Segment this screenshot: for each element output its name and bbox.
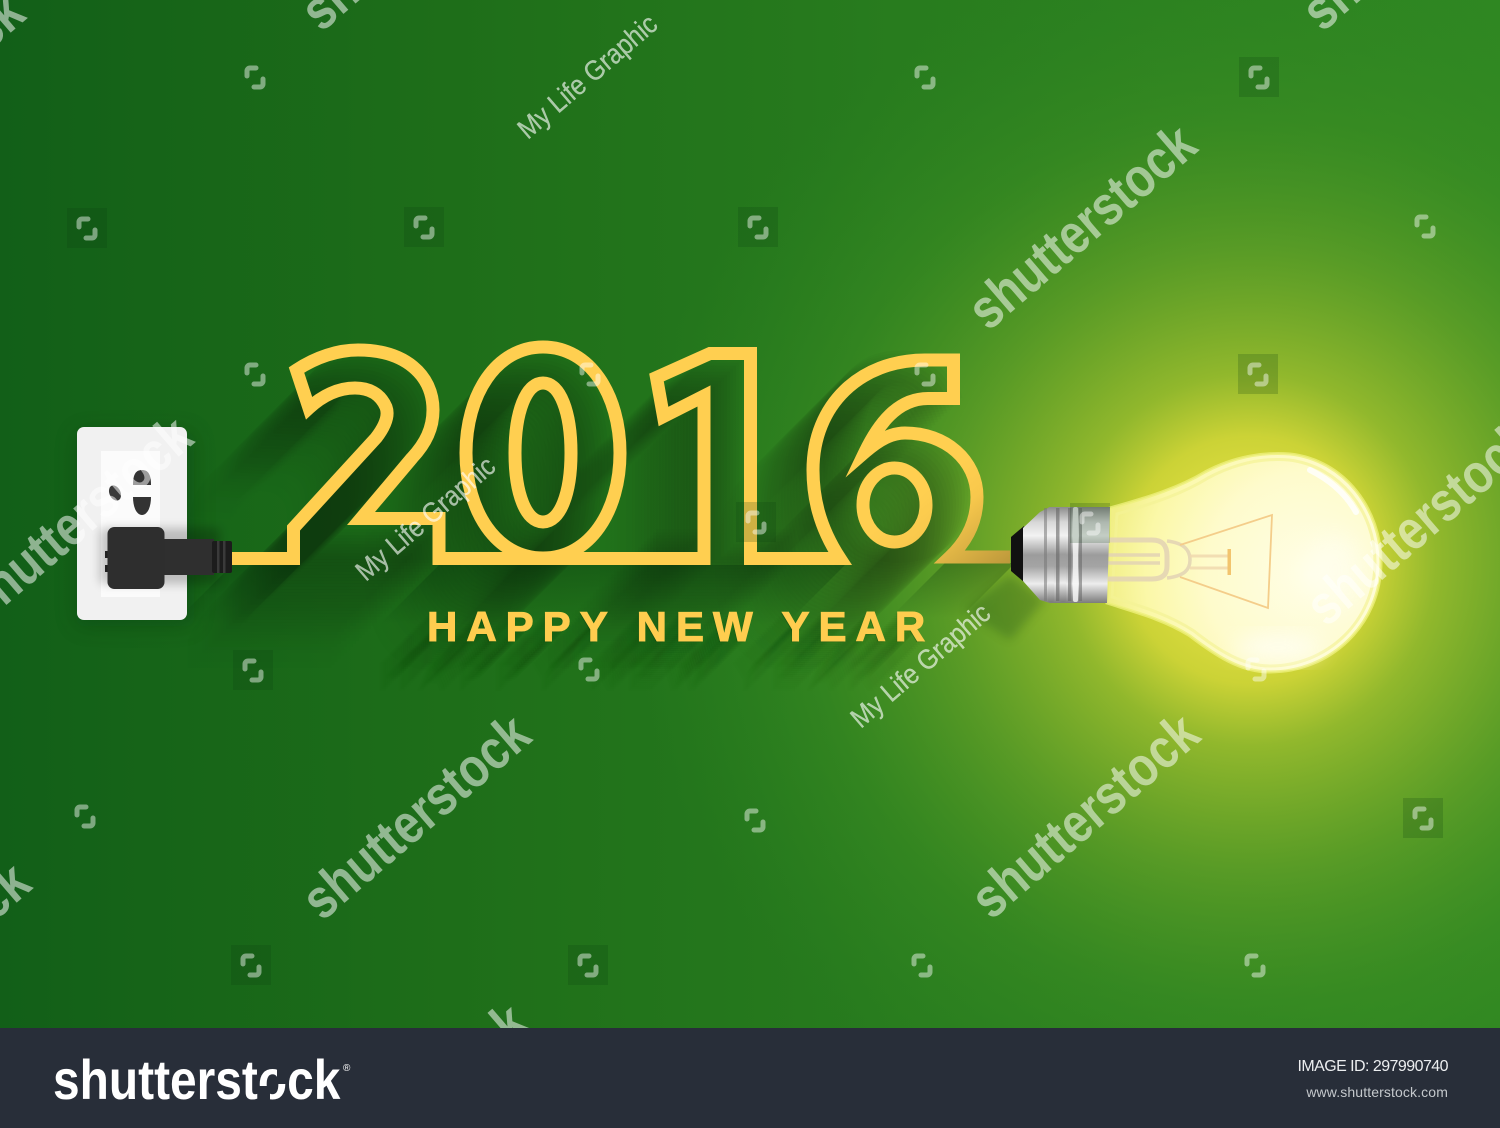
glass highlight arc xyxy=(1310,470,1356,512)
black contact tip xyxy=(1011,526,1034,582)
footer logo: shutterstock xyxy=(53,1048,340,1111)
filament stem xyxy=(1108,540,1228,579)
long shadow of the 2016 numerals xyxy=(222,356,962,638)
wire: outer ring of 0 xyxy=(466,347,620,558)
screw threads xyxy=(1044,507,1082,602)
watermark text: My Life Graphic: My Life Graphic xyxy=(511,8,663,145)
bulb glass xyxy=(1107,454,1381,672)
white glow spots xyxy=(1307,534,1363,606)
filament wire xyxy=(1180,515,1272,608)
watermark text: My Life Graphic: My Life Graphic xyxy=(844,597,996,734)
footer bar xyxy=(0,1028,1500,1128)
wire: continuous outline of 2, 1 and 6 xyxy=(232,350,1010,558)
glass rim highlight xyxy=(1112,460,1375,666)
filament bar xyxy=(1228,549,1231,575)
watermark text: shutterstock: shutterstock xyxy=(289,701,542,931)
watermark text: shutterstock: shutterstock xyxy=(955,111,1208,341)
watermark text: My Life Graphic xyxy=(349,8,996,734)
shadows below the cord baseline xyxy=(172,563,1015,625)
watermark text: My Life Graphic: My Life Graphic xyxy=(349,450,501,587)
metal screw base xyxy=(1023,507,1110,603)
watermark tiles with dark squares xyxy=(67,57,1443,985)
watermark text: shutterstock: shutterstock xyxy=(958,700,1211,930)
watermark bracket icons xyxy=(77,68,1433,975)
light bulb xyxy=(1011,454,1381,672)
image id: IMAGE ID: 297990740 xyxy=(1297,1058,1448,1075)
power plug xyxy=(100,527,232,589)
heading: happy new year: HAPPY NEW YEAR xyxy=(427,602,934,650)
wall socket xyxy=(76,427,194,626)
wire: loop of 6 xyxy=(863,468,926,542)
website: www.shutterstock.com xyxy=(1306,1084,1448,1100)
watermark text: shutterstock: ck xyxy=(459,990,539,1072)
shadow below the bulb base xyxy=(965,575,1045,640)
2016 wire numerals xyxy=(232,347,1010,558)
footer logo: ® xyxy=(343,1063,350,1074)
wire: inner ring of 0 xyxy=(515,383,571,522)
